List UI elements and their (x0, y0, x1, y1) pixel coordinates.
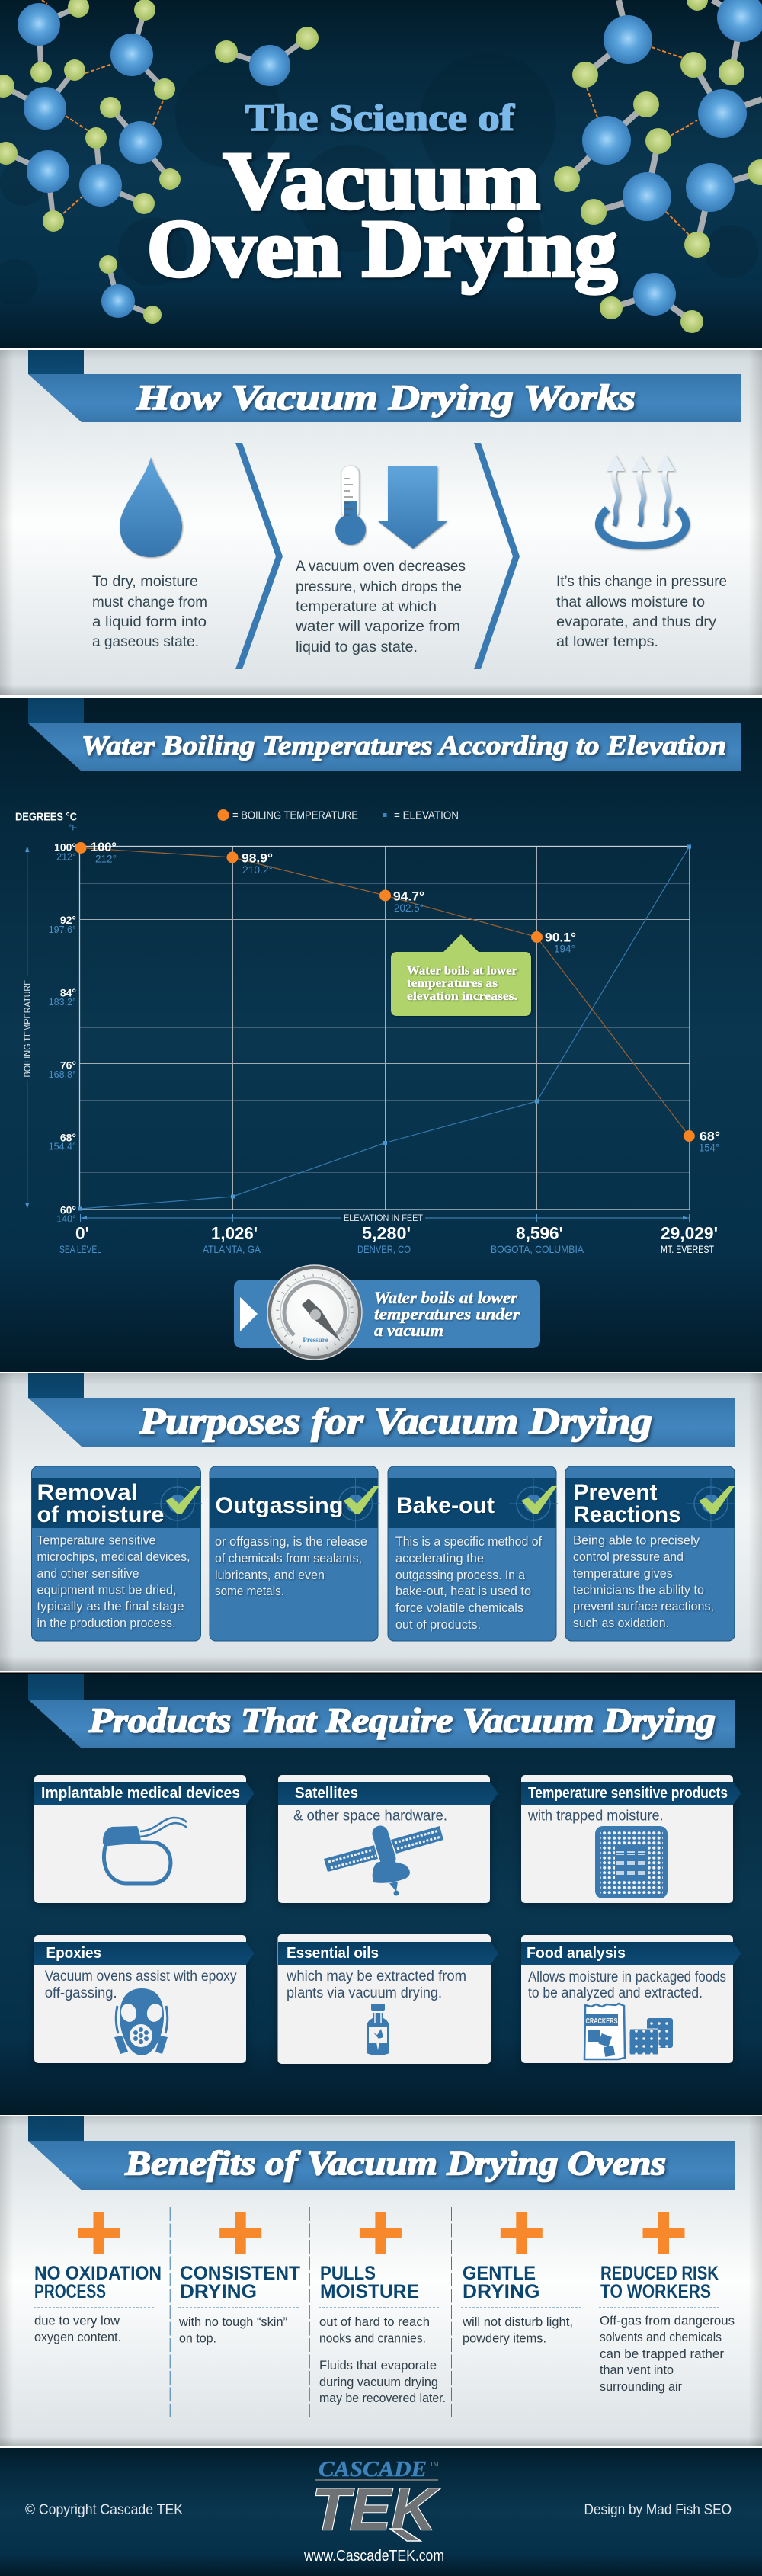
benefit: pulls moisture: out of hard to reach (319, 2315, 430, 2329)
callout: water boils as elevation increases: elevation increases. (407, 990, 517, 1003)
icon: pressure gauge: Pressure (303, 1336, 328, 1344)
benefit: gentle drying: GENTLE (463, 2263, 536, 2284)
y axis temperature labels: 140° (56, 1213, 76, 1224)
x axis elevation labels: 1,026' (211, 1223, 258, 1243)
card: removal of moisture: of moisture (37, 1502, 164, 1527)
data point labels: 202.5° (394, 902, 424, 914)
axis title: degrees (15, 811, 77, 832)
molecules: right cluster (554, 0, 762, 333)
card: prevent reactions: technicians the ability to (573, 1582, 704, 1597)
card: bake-out (388, 1466, 558, 1641)
card: food analysis: Food analysis (527, 1945, 626, 1962)
heading banner: products: Products That Require Vacuum Drying (88, 1701, 716, 1739)
text: change in pressure: It’s this change in pressure (556, 574, 727, 590)
card: removal of moisture: typically as the final stage (37, 1599, 184, 1613)
heading banner: products (28, 1674, 735, 1748)
x axis elevation labels: 29,029' (661, 1223, 718, 1243)
benefit: consistent drying (178, 2212, 300, 2346)
benefit: gentle drying: powdery items. (463, 2331, 546, 2346)
text: vacuum oven decreases pressure: A vacuum oven decreases (296, 559, 466, 575)
logo: Cascade TEK: CASCADE (319, 2457, 427, 2481)
callout: water boils under a vacuum: temperatures under (374, 1305, 520, 1323)
card: temperature sensitive products: Temperature sensitive products (528, 1785, 728, 1802)
axis title: degrees: DEGREES °C (15, 811, 77, 823)
data point labels: 68° (700, 1129, 720, 1143)
benefit: reduced risk to workers (600, 2212, 735, 2394)
x axis elevation labels: 0' (75, 1223, 89, 1243)
x axis elevation labels: ATLANTA, GA (203, 1243, 261, 1255)
x axis arrow: elevation in feet (81, 1213, 689, 1223)
benefit: pulls moisture: during vacuum drying (319, 2375, 438, 2389)
text: change in pressure: that allows moisture to (556, 594, 705, 610)
card: removal of moisture: Temperature sensitive (37, 1533, 155, 1547)
icon: gas mask (114, 1988, 168, 2055)
benefit: consistent drying: with no tough “skin” (178, 2315, 287, 2329)
card: outgassing: some metals. (215, 1584, 284, 1598)
card: bake-out: out of products. (395, 1617, 481, 1632)
card: removal of moisture: and other sensitive (37, 1566, 139, 1581)
panel: header (0, 0, 762, 348)
card: essential oils: Essential oils (287, 1945, 379, 1962)
panel: purposes for vacuum drying (0, 1373, 762, 1671)
icon: pressure gauge (267, 1265, 362, 1360)
benefit: reduced risk to workers: than vent into (600, 2363, 674, 2377)
x axis elevation labels (59, 1223, 718, 1255)
card: outgassing (210, 1466, 379, 1641)
card: epoxies (34, 1935, 255, 2063)
benefit: reduced risk to workers: REDUCED RISK (600, 2263, 719, 2284)
text: change in pressure (556, 574, 727, 650)
x axis elevation labels: SEA LEVEL (59, 1243, 101, 1255)
benefit: consistent drying: CONSISTENT (180, 2263, 300, 2284)
icon: pacemaker (103, 1818, 187, 1883)
card: prevent reactions: Reactions (573, 1502, 681, 1527)
card: epoxies: Epoxies (46, 1945, 101, 1962)
panel: footer (0, 2448, 762, 2576)
y axis temperature labels: 100° (54, 841, 76, 854)
x axis arrow: elevation in feet: ELEVATION IN FEET (344, 1213, 424, 1223)
y axis arrow: boiling temperature: BOILING TEMPERATURE (24, 979, 33, 1078)
benefit: pulls moisture: Fluids that evaporate (319, 2358, 437, 2373)
title: Vacuum (223, 136, 540, 226)
benefit: no oxidation process: PROCESS (34, 2281, 106, 2302)
card: outgassing: Outgassing (215, 1493, 343, 1518)
benefit: pulls moisture: may be recovered later. (319, 2391, 446, 2405)
title: The Science of (245, 96, 516, 139)
card: bake-out: outgassing process. In a (395, 1568, 525, 1582)
benefit: reduced risk to workers: solvents and chemicals (600, 2330, 722, 2344)
benefit: pulls moisture: MOISTURE (320, 2281, 419, 2302)
card: prevent reactions: Being able to precisely (573, 1533, 700, 1547)
benefit: reduced risk to workers: TO WORKERS (600, 2281, 711, 2302)
y axis temperature labels: 60° (60, 1204, 76, 1216)
title (147, 96, 617, 294)
icon: evaporation steam (599, 455, 686, 546)
data point labels: 98.9° (242, 851, 273, 866)
y axis temperature labels: 154.4° (49, 1142, 76, 1152)
icon: satellite (324, 1826, 443, 1896)
card: prevent reactions (565, 1466, 735, 1641)
benefit: no oxidation process: NO OXIDATION (34, 2263, 162, 2284)
y axis temperature labels: 68° (60, 1131, 76, 1143)
callout: water boils as elevation increases: Water boils at lower (407, 965, 517, 977)
card: removal of moisture: microchips, medical devices, (37, 1549, 190, 1564)
y axis temperature labels (49, 841, 76, 1224)
benefit: gentle drying (462, 2212, 573, 2346)
benefit: reduced risk to workers: can be trapped rather (600, 2347, 724, 2361)
icon: oil bottle (367, 2004, 389, 2055)
chart legend: = BOILING TEMPERATURE (232, 809, 358, 822)
data point labels: 154° (699, 1142, 719, 1154)
panel: how vacuum drying works (0, 350, 762, 695)
heading banner: water boiling temperatures (28, 698, 741, 771)
card: removal of moisture: Removal (37, 1480, 137, 1505)
data point labels: 100° (91, 840, 117, 854)
heading banner: purposes: Purposes for Vacuum Drying (139, 1400, 652, 1442)
icon: crackers: CRACKERS (585, 2017, 618, 2026)
x axis elevation labels: DENVER, CO (357, 1243, 411, 1255)
heading banner: how vacuum drying works: How Vacuum Drying Works (136, 378, 636, 418)
card: outgassing: of chemicals from sealants, (215, 1551, 362, 1565)
data point labels: 212° (95, 852, 117, 864)
card: removal of moisture: in the production process. (37, 1616, 175, 1630)
icon: crackers (584, 2004, 673, 2059)
callout: water boils under a vacuum (234, 1265, 540, 1360)
card: implantable medical devices (34, 1775, 255, 1903)
card: satellites: Satellites (295, 1785, 358, 1802)
card: removal of moisture (32, 1466, 202, 1641)
data point labels: 210.2° (242, 863, 273, 876)
x axis elevation labels: BOGOTA, COLUMBIA (491, 1243, 584, 1255)
y axis temperature labels: 168.8° (49, 1069, 76, 1080)
x axis elevation labels: 8,596' (516, 1223, 563, 1243)
card: bake-out: This is a specific method of (395, 1534, 542, 1549)
icon: microchip (592, 1826, 671, 1898)
card: satellites: & other space hardware. (293, 1808, 447, 1825)
chart legend: = ELEVATION (394, 809, 459, 822)
text: liquid to gas: a gaseous state. (92, 634, 199, 650)
text: design credit: Design by Mad Fish SEO (584, 2502, 732, 2518)
data point labels (91, 840, 720, 1154)
card: temperature sensitive products (521, 1775, 741, 1903)
card: essential oils: plants via vacuum drying. (287, 1985, 442, 2001)
y axis temperature labels: 197.6° (49, 924, 76, 935)
benefit: gentle drying: DRYING (463, 2281, 539, 2302)
y axis temperature labels: 84° (60, 986, 76, 998)
logo: Cascade TEK: TM (430, 2461, 439, 2468)
card: satellites (278, 1775, 498, 1903)
benefit: no oxidation process (34, 2212, 162, 2344)
heading banner: how vacuum drying works (28, 350, 741, 422)
text: vacuum oven decreases pressure: pressure, which drops the (296, 579, 462, 595)
x axis elevation labels: 5,280' (362, 1223, 411, 1243)
text: copyright: © Copyright Cascade TEK (25, 2502, 183, 2518)
card: bake-out: force volatile chemicals (395, 1600, 523, 1615)
card: prevent reactions: Prevent (573, 1480, 658, 1505)
benefit: gentle drying: will not disturb light, (462, 2315, 573, 2329)
text: liquid to gas: a liquid form into (92, 614, 207, 630)
callout: water boils as elevation increases (391, 934, 531, 1016)
card: food analysis (521, 1935, 741, 2063)
y axis temperature labels: 76° (60, 1059, 76, 1072)
y axis arrow: boiling temperature (24, 846, 33, 1209)
text: website: www.CascadeTEK.com (303, 2548, 444, 2565)
card: epoxies: off-gassing. (45, 1985, 117, 2001)
text: liquid to gas: To dry, moisture (92, 574, 198, 590)
heading banner: benefits: Benefits of Vacuum Drying Ovens (124, 2145, 666, 2182)
chart legend (218, 809, 459, 822)
benefit: reduced risk to workers: Off-gas from dangerous (600, 2314, 735, 2328)
text: change in pressure: evaporate, and thus dry (556, 614, 717, 630)
heading banner: purposes (28, 1373, 735, 1447)
benefit: pulls moisture (319, 2212, 446, 2405)
panel: products that require vacuum drying (0, 1674, 762, 2115)
benefit: pulls moisture: nooks and crannies. (319, 2331, 426, 2346)
benefit: consistent drying: on top. (179, 2331, 216, 2346)
card: bake-out: Bake-out (396, 1493, 495, 1518)
text: vacuum oven decreases pressure (295, 559, 466, 655)
data point labels: 90.1° (545, 930, 576, 945)
benefit: no oxidation process: due to very low (34, 2314, 120, 2328)
molecules: left cluster (0, 0, 319, 324)
arrow: chevron one (235, 443, 283, 669)
card: outgassing: or offgassing, is the release (215, 1534, 367, 1549)
arrow: chevron two (474, 443, 520, 669)
title: Oven Drying (147, 204, 617, 294)
text: liquid to gas: must change from (92, 594, 207, 610)
y axis temperature labels: 183.2° (49, 997, 76, 1008)
callout: water boils as elevation increases: temperatures as (407, 977, 498, 990)
text: change in pressure: at lower temps. (556, 634, 658, 650)
card: removal of moisture: equipment must be dried, (37, 1582, 177, 1597)
card: prevent reactions: control pressure and (573, 1549, 684, 1564)
text: liquid to gas (92, 574, 207, 650)
benefit: pulls moisture: PULLS (320, 2263, 376, 2284)
heading banner: benefits (28, 2116, 735, 2190)
benefit: consistent drying: DRYING (180, 2281, 257, 2302)
data point labels: 94.7° (393, 889, 424, 904)
icon: thermometer (335, 466, 366, 545)
heading banner: water boiling temperatures: Water Boiling Temperatures According to Elevation (82, 730, 726, 761)
text: vacuum oven decreases pressure: temperature at which (296, 599, 437, 615)
card: food analysis: to be analyzed and extracted. (528, 1985, 703, 2001)
text: vacuum oven decreases pressure: water will vaporize from (295, 619, 460, 635)
y axis temperature labels: 92° (60, 914, 76, 926)
card: bake-out: bake-out, heat is used to (395, 1584, 531, 1598)
benefit: no oxidation process: oxygen content. (34, 2330, 121, 2344)
panel: benefits of vacuum drying ovens (0, 2116, 762, 2446)
x axis elevation labels: MT. EVEREST (661, 1243, 714, 1255)
line chart (75, 842, 695, 1210)
icon: down arrow (378, 466, 447, 549)
benefit: reduced risk to workers: surrounding air (600, 2379, 682, 2394)
y axis temperature labels: 212° (56, 852, 76, 863)
card: prevent reactions: temperature gives (573, 1566, 673, 1581)
callout: water boils under a vacuum: Water boils at lower (374, 1288, 517, 1307)
card: outgassing: lubricants, and even (215, 1568, 325, 1582)
card: prevent reactions: prevent surface reactions, (573, 1599, 714, 1613)
card: food analysis: Allows moisture in packaged foods (528, 1969, 726, 1985)
text: vacuum oven decreases pressure: liquid to gas state. (296, 639, 418, 655)
card: prevent reactions: such as oxidation. (573, 1616, 669, 1630)
card: bake-out: accelerating the (395, 1551, 484, 1565)
card: epoxies: Vacuum ovens assist with epoxy (45, 1969, 237, 1985)
callout: water boils under a vacuum: a vacuum (374, 1321, 443, 1340)
axis title: degrees: °F (69, 823, 77, 832)
icon: water drop (120, 457, 182, 557)
card: temperature sensitive products: with trapped moisture. (527, 1808, 663, 1825)
card: essential oils (277, 1934, 498, 2064)
panel: water boiling temperatures (0, 698, 762, 1372)
card: essential oils: which may be extracted from (286, 1969, 466, 1985)
card: implantable medical devices: Implantable medical devices (41, 1785, 240, 1802)
data point labels: 194° (554, 942, 575, 954)
logo: Cascade TEK: TEK (312, 2475, 440, 2542)
